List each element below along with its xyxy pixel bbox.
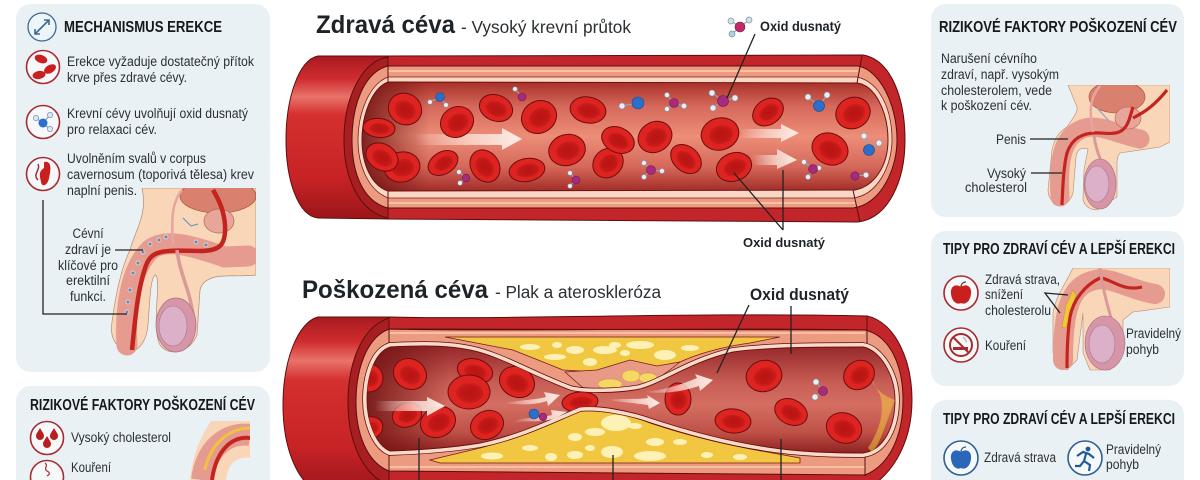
callout: oxid dusnatý damaged <box>419 286 850 480</box>
text: narušení cévního zdraví: Narušení cévního <box>941 51 1037 66</box>
illustration: anatomy erect <box>111 179 256 352</box>
text: pravidelný pohyb <box>1106 442 1161 472</box>
legend: oxid dusnatý molecule: Oxid dusnatý <box>760 18 841 34</box>
red blood cells <box>361 87 875 188</box>
heading: poškozená céva <box>302 276 661 304</box>
callout: penis, vysoký cholesterol: Vysoký <box>987 166 1026 181</box>
callout: cévní zdraví: funkci. <box>70 289 106 304</box>
text: kouření: Kouření <box>985 338 1026 353</box>
heading: poškozená céva: - Plak a ateroskleróza <box>495 282 661 302</box>
panel: tipy s ikonami <box>931 400 1184 480</box>
upper plaque <box>445 337 780 394</box>
vessel wall <box>286 55 905 222</box>
text: zdravá strava: Zdravá strava, <box>985 272 1060 287</box>
callout lines: oxid dusnatý <box>727 34 826 250</box>
text: corpus cavernosum <box>67 151 254 198</box>
icon: no smoking <box>944 328 978 362</box>
text: zdravá strava: snížení <box>985 287 1023 302</box>
illustration: plaque in penis <box>190 421 250 480</box>
callout: cévní zdraví: erektilní <box>66 273 110 288</box>
text: zdravá strava: cholesterolu <box>985 303 1051 318</box>
heading: rizikové faktory: RIZIKOVÉ FAKTORY POŠKOZENÍ CÉV <box>30 395 255 414</box>
callout lines: oxid dusnatý: Oxid dusnatý <box>743 235 826 250</box>
illustration: anatomy with arteries <box>1048 81 1170 210</box>
callout: penis, vysoký cholesterol: cholesterol <box>965 180 1027 195</box>
panel: rizikové faktory vpravo <box>931 4 1184 217</box>
heading: poškozená céva: Poškozená céva <box>302 276 489 304</box>
illustration: plaque anatomy <box>1053 268 1170 370</box>
text: přítok krve <box>67 54 254 85</box>
icon: drops <box>30 422 64 454</box>
text: narušení cévního zdraví <box>941 51 1059 113</box>
text: zdravá strava <box>985 272 1060 318</box>
text: pravidelný pohyb: Pravidelný <box>1126 326 1181 341</box>
legend: oxid dusnatý molecule <box>728 17 841 37</box>
text: pravidelný pohyb: pohyb <box>1126 342 1159 357</box>
icon: arrows <box>28 13 56 41</box>
damaged vessel wall <box>283 315 912 480</box>
icon: smoking <box>30 460 64 480</box>
callout: penis, vysoký cholesterol <box>965 132 1068 195</box>
vessel lumen <box>362 82 888 191</box>
text: narušení cévního zdraví: k poškození cév. <box>941 98 1032 113</box>
callout: cévní zdraví: zdraví je <box>65 242 111 257</box>
text: vysoký cholesterol: Vysoký cholesterol <box>71 430 171 445</box>
heading: zdravá céva: - Vysoký krevní průtok <box>461 17 631 37</box>
callout: cévní zdraví: Cévní <box>72 226 104 241</box>
leader lines <box>1045 293 1068 313</box>
text: corpus cavernosum: Uvolněním svalů v corpus <box>67 151 206 166</box>
text: corpus cavernosum: naplní penis. <box>67 183 137 198</box>
heading: zdravá céva: Zdravá céva <box>316 11 456 39</box>
icon: red blood cells <box>26 50 60 84</box>
flow arrows in damaged vessel <box>375 374 713 423</box>
icon: runner <box>1068 441 1102 475</box>
text: oxid dusnatý <box>67 106 248 137</box>
text: corpus cavernosum: cavernosum (toporivá tělesa) krev <box>67 167 254 182</box>
red blood cells in damaged vessel <box>367 358 875 444</box>
text: pravidelný pohyb <box>1126 326 1181 357</box>
icon: penis section <box>26 158 60 190</box>
callout: penis, vysoký cholesterol: Penis <box>996 132 1026 147</box>
molecules <box>428 87 882 188</box>
heading: mechanismus erekce: MECHANISMUS EREKCE <box>64 19 222 36</box>
text: kouření: Kouření <box>71 460 111 475</box>
callout: cévní zdraví: klíčové pro <box>58 258 118 273</box>
text: pravidelný pohyb: pohyb <box>1106 457 1139 472</box>
text: narušení cévního zdraví: cholesterolem, vede <box>941 83 1052 98</box>
panel: mechanismus erekce <box>16 4 270 372</box>
text: narušení cévního zdraví: zdraví, např. vysokým <box>941 67 1059 82</box>
icon: molecule <box>26 106 60 138</box>
icon: blue apple <box>944 441 978 475</box>
narrowed lumen <box>367 346 895 453</box>
flow arrows <box>415 124 799 169</box>
callout: oxid dusnatý damaged: Oxid dusnatý <box>750 286 850 304</box>
text: pravidelný pohyb: Pravidelný <box>1106 442 1161 457</box>
diagram: zdravá céva <box>286 55 905 222</box>
icon: apple <box>944 276 978 310</box>
text: přítok krve: krve přes zdravé cévy. <box>67 70 187 85</box>
text: oxid dusnatý: Krevní cévy uvolňují oxid dusnatý <box>67 106 248 121</box>
heading: zdravá céva <box>316 11 631 39</box>
lower plaque <box>430 410 800 463</box>
callout: cévní zdraví <box>43 200 143 314</box>
panel: tipy se stravou a kouřením <box>931 231 1184 386</box>
text: oxid dusnatý: pro relaxaci cév. <box>67 122 157 137</box>
molecules in damaged vessel <box>529 379 828 421</box>
panel: rizikové faktory vlevo <box>16 386 270 480</box>
diagram: poškozená céva <box>283 315 912 480</box>
text: přítok krve: Erekce vyžaduje dostatečný přítok <box>67 54 254 69</box>
text: zdravá strava: Zdravá strava <box>984 450 1056 465</box>
